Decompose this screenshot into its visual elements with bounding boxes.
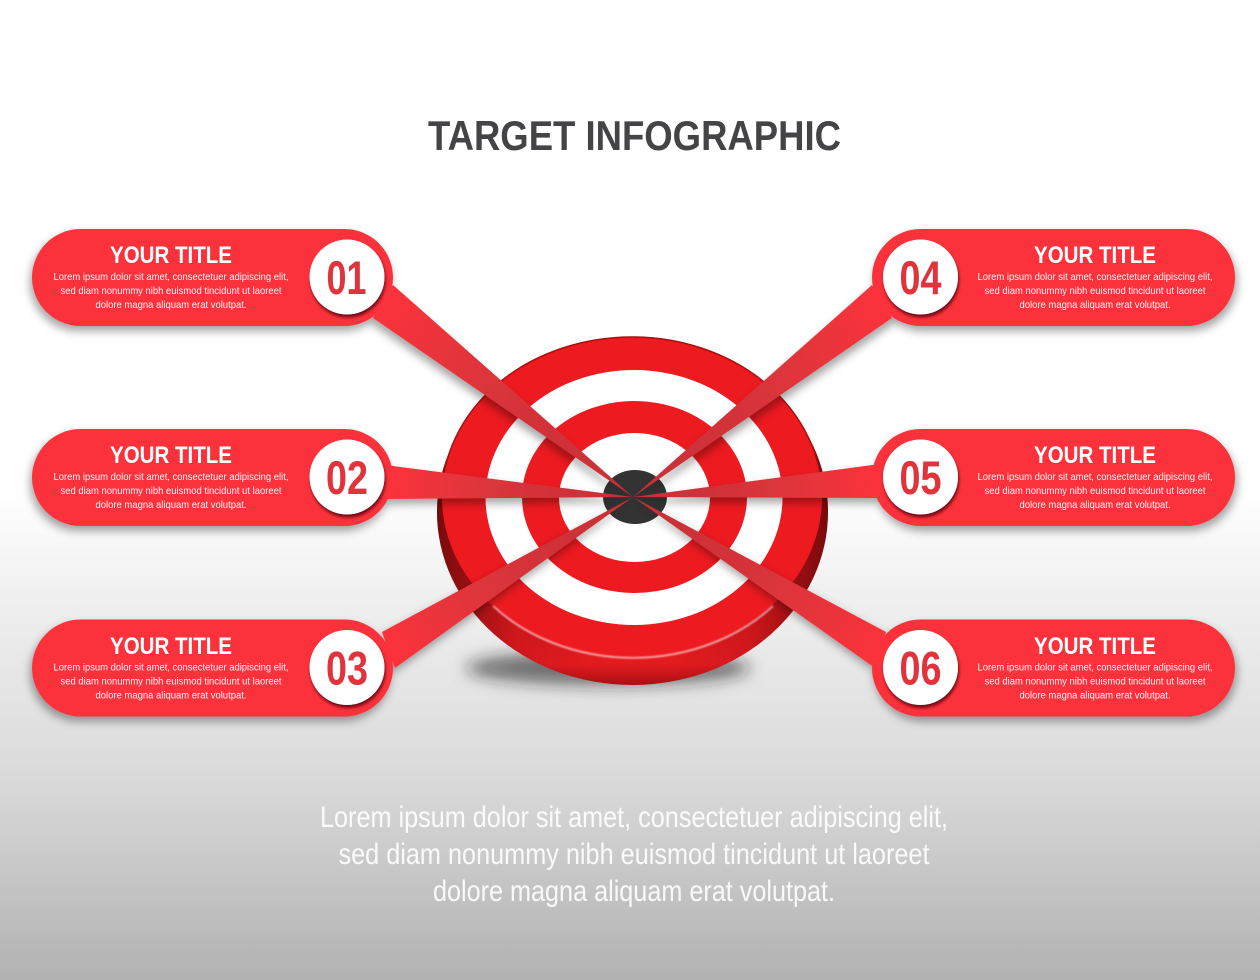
- footer text: dolore magna aliquam erat volutpat.: [433, 875, 835, 908]
- callout 03: [32, 497, 633, 716]
- target body: [437, 339, 828, 685]
- text 06: Lorem ipsum dolor sit amet, consectetuer adipiscing elit,: [978, 662, 1212, 674]
- footer text: Lorem ipsum dolor sit amet, consectetuer adipiscing elit,: [320, 801, 948, 834]
- target dartboard: [437, 337, 828, 685]
- text 06: [978, 662, 1212, 702]
- text 06: sed diam nonummy nibh euismod tincidunt ut laoreet: [984, 676, 1206, 688]
- text 03: Lorem ipsum dolor sit amet, consectetuer adipiscing elit,: [54, 662, 288, 674]
- number badge 03: [310, 630, 384, 705]
- heading 01: YOUR TITLE: [110, 242, 232, 269]
- text 01: [54, 271, 288, 311]
- target edge highlight: [493, 606, 773, 658]
- text 03: [54, 662, 288, 702]
- footer text: sed diam nonummy nibh euismod tincidunt ut laoreet: [338, 838, 930, 871]
- heading 02: YOUR TITLE: [110, 442, 232, 469]
- text 02: Lorem ipsum dolor sit amet, consectetuer adipiscing elit,: [54, 471, 288, 483]
- heading 04: YOUR TITLE: [1034, 242, 1156, 269]
- text 01: sed diam nonummy nibh euismod tincidunt ut laoreet: [60, 285, 282, 297]
- text 05: [978, 471, 1212, 511]
- number badge 06: [883, 630, 958, 705]
- callout 04: [633, 229, 1235, 497]
- text 02: sed diam nonummy nibh euismod tincidunt ut laoreet: [60, 485, 282, 497]
- pointer and panel 01: [32, 229, 633, 497]
- text 04: Lorem ipsum dolor sit amet, consectetuer adipiscing elit,: [978, 271, 1212, 283]
- number badge 01: 01: [326, 251, 366, 304]
- text 04: [978, 271, 1212, 311]
- title: TARGET INFOGRAPHIC: [428, 112, 841, 159]
- callout 01: [32, 229, 633, 497]
- pointer and panel 03: [32, 497, 633, 716]
- text 04: dolore magna aliquam erat volutpat.: [1020, 299, 1170, 311]
- target ground shadow: [466, 651, 750, 685]
- text 04: sed diam nonummy nibh euismod tincidunt ut laoreet: [984, 285, 1206, 297]
- callout 06: [633, 497, 1235, 716]
- number badge 03: 03: [326, 642, 368, 694]
- text 05: sed diam nonummy nibh euismod tincidunt ut laoreet: [984, 485, 1206, 497]
- callout 02: [32, 429, 633, 526]
- heading 03: YOUR TITLE: [110, 633, 232, 660]
- number badge 06: 06: [900, 642, 942, 694]
- number badge 02: [310, 440, 384, 514]
- pointer and panel 02: [32, 429, 633, 526]
- callout 05: [633, 429, 1235, 526]
- text 02: dolore magna aliquam erat volutpat.: [96, 499, 246, 511]
- heading 06: YOUR TITLE: [1034, 633, 1156, 660]
- text 03: dolore magna aliquam erat volutpat.: [96, 690, 246, 702]
- number badge 01: [310, 240, 384, 314]
- text 06: dolore magna aliquam erat volutpat.: [1020, 690, 1170, 702]
- number badge 05: 05: [900, 451, 942, 504]
- heading 05: YOUR TITLE: [1034, 442, 1156, 469]
- number badge 04: 04: [900, 251, 942, 304]
- target face rings: [442, 337, 822, 657]
- number badge 04: [883, 240, 958, 314]
- pointer and panel 06: [633, 497, 1235, 716]
- text 05: dolore magna aliquam erat volutpat.: [1020, 499, 1170, 511]
- number badge 05: [883, 440, 958, 514]
- text 02: [54, 471, 288, 511]
- text 03: sed diam nonummy nibh euismod tincidunt ut laoreet: [60, 676, 282, 688]
- text 01: dolore magna aliquam erat volutpat.: [96, 299, 246, 311]
- pointer and panel 05: [633, 429, 1235, 526]
- number badge 02: 02: [326, 451, 368, 504]
- bullseye: [603, 470, 667, 524]
- text 01: Lorem ipsum dolor sit amet, consectetuer adipiscing elit,: [54, 271, 288, 283]
- text 05: Lorem ipsum dolor sit amet, consectetuer adipiscing elit,: [978, 471, 1212, 483]
- pointer and panel 04: [633, 229, 1235, 497]
- footer text: [320, 801, 948, 908]
